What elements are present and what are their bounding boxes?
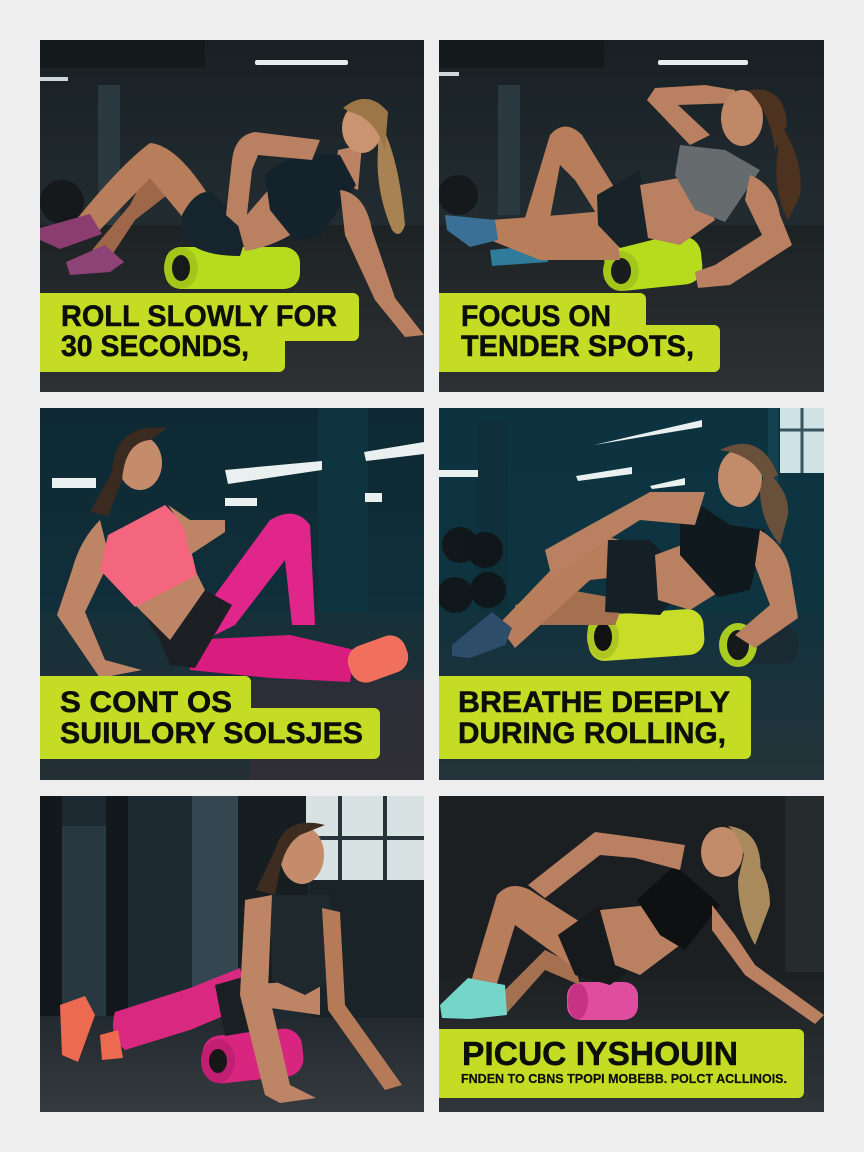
label: focus on tender spots: TENDER SPOTS, [461, 330, 694, 363]
figure: side lean [452, 470, 798, 658]
figure: woman in pink [57, 505, 355, 682]
label: unreadable tip [439, 1029, 804, 1098]
label: roll slowly: 30 SECONDS, [61, 330, 249, 363]
foam roller [567, 982, 638, 1020]
figure: side lean dark kit [440, 832, 824, 1024]
figure: woman on roller [40, 120, 424, 337]
figure: woman raised arm [445, 85, 801, 288]
head [342, 99, 388, 153]
panel: breathe deeply [437, 408, 824, 780]
figure: plank [60, 895, 402, 1103]
label: breathe deeply: DURING ROLLING, [458, 717, 726, 750]
label: focus on tender spots [439, 293, 720, 372]
head [721, 89, 787, 150]
panel: plank on roller [40, 796, 424, 1112]
label: breathe deeply [439, 676, 751, 759]
panel: focus on tender spots [438, 40, 824, 392]
head [701, 826, 761, 880]
label: breathe deeply: BREATHE DEEPLY [458, 686, 730, 719]
foam roller [201, 1027, 305, 1085]
foam roller [603, 238, 702, 291]
panel: pink leggings seated [40, 408, 424, 780]
label: roll slowly: ROLL SLOWLY FOR [61, 300, 337, 333]
label: unreadable tip: SUIULORY SOLSJES [60, 717, 363, 750]
panel: roll slowly [40, 40, 424, 392]
label: unreadable tip: PICUC IYSHOUIN [462, 1035, 738, 1072]
label: unreadable tip: FNDEN TO CBNS TPOPI MOBEBB. POLCT ACLLINOIS. [461, 1072, 787, 1086]
head [90, 427, 167, 516]
label: roll slowly [40, 293, 359, 372]
head [718, 444, 778, 507]
foam roller [348, 635, 408, 683]
label: unreadable tip [40, 676, 380, 759]
foam roller [164, 247, 300, 289]
label: focus on tender spots: FOCUS ON [461, 300, 611, 333]
panel: side stretch [439, 796, 824, 1112]
label: unreadable tip: S CONT OS [60, 686, 232, 719]
foam rollers [587, 608, 798, 667]
head [256, 823, 325, 895]
